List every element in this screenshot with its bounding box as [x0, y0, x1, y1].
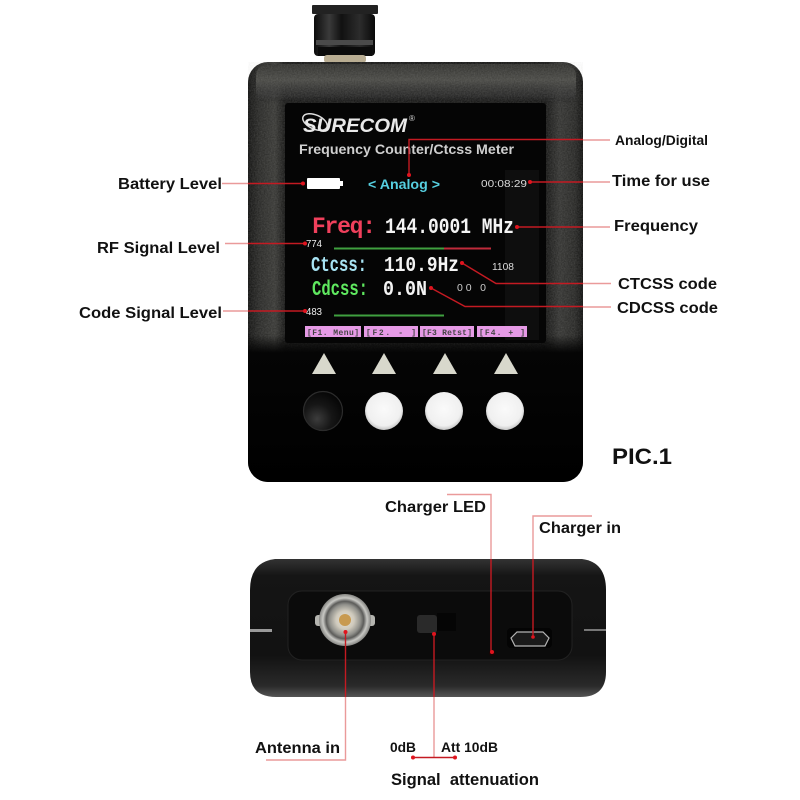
label: 0dB: 0dB	[390, 739, 416, 755]
CDCSS readout: 00 0	[457, 282, 486, 294]
label: Charger LED: Charger LED	[385, 499, 486, 516]
RF level bar	[334, 248, 491, 250]
function bar: [F1. Menu]	[307, 329, 359, 338]
soft keys	[365, 392, 524, 430]
frequency readout: 144.0001 MHz	[385, 215, 514, 240]
frequency readout: Freq:	[312, 214, 376, 240]
device: front view	[248, 5, 583, 482]
label: Time for use: Time for use	[612, 173, 710, 190]
screen	[285, 103, 546, 343]
antenna connector	[312, 5, 378, 63]
panel label: PIC.1: PIC.1	[612, 444, 672, 469]
micro USB port	[507, 628, 552, 648]
brand logo: SURECOM	[303, 116, 408, 137]
CTCSS readout	[311, 255, 514, 278]
label: Frequency: Frequency	[614, 218, 698, 235]
label: Code Signal Level: Code Signal Level	[79, 305, 222, 322]
label: Battery Level: Battery Level	[118, 176, 222, 193]
battery icon	[307, 178, 343, 189]
mode readout: < Analog >	[368, 176, 440, 192]
function bar: [F2. - ]	[366, 329, 416, 338]
label: Att 10dB: Att 10dB	[441, 739, 498, 755]
function bar: [F4. + ]	[479, 329, 525, 338]
device body	[248, 62, 583, 482]
timer: 00:08:29	[481, 179, 528, 190]
function bar	[305, 326, 527, 338]
bottom body	[250, 559, 606, 697]
charger LED	[489, 650, 495, 656]
screen heading: Frequency Counter/Ctcss Meter	[299, 141, 515, 157]
power button	[304, 392, 342, 430]
label: Analog/Digital: Analog/Digital	[615, 132, 708, 148]
device: bottom view	[250, 559, 606, 697]
CTCSS readout: Ctcss:	[311, 255, 367, 278]
CDCSS readout: Cdcss:	[312, 279, 368, 302]
CDCSS readout: 0.0N	[383, 279, 427, 302]
CTCSS readout: 110.9Hz	[384, 255, 459, 278]
recessed panel	[288, 591, 572, 660]
button arrows	[312, 353, 518, 374]
label: CDCSS code: CDCSS code	[617, 300, 718, 317]
label: Antenna in: Antenna in	[255, 740, 340, 757]
CDCSS readout	[312, 279, 486, 302]
function bar: [F3 Retst]	[422, 329, 472, 338]
CTCSS readout: 1108	[492, 262, 514, 273]
code level bar	[334, 314, 444, 316]
label: CTCSS code: CTCSS code	[618, 276, 717, 293]
attenuation switch	[417, 613, 456, 633]
brand logo: ®	[409, 114, 415, 123]
brand logo	[300, 110, 415, 137]
leader lines on device	[248, 140, 583, 758]
code value: 483	[306, 307, 322, 318]
leader lines on white	[222, 140, 611, 760]
label: RF Signal Level: RF Signal Level	[97, 240, 220, 257]
label: Signal attenuation: Signal attenuation	[391, 771, 539, 789]
RF value: 774	[306, 239, 322, 250]
label: Charger in: Charger in	[539, 520, 621, 537]
BNC antenna socket	[315, 594, 375, 646]
leader end dots	[301, 173, 535, 760]
frequency readout	[312, 214, 514, 240]
